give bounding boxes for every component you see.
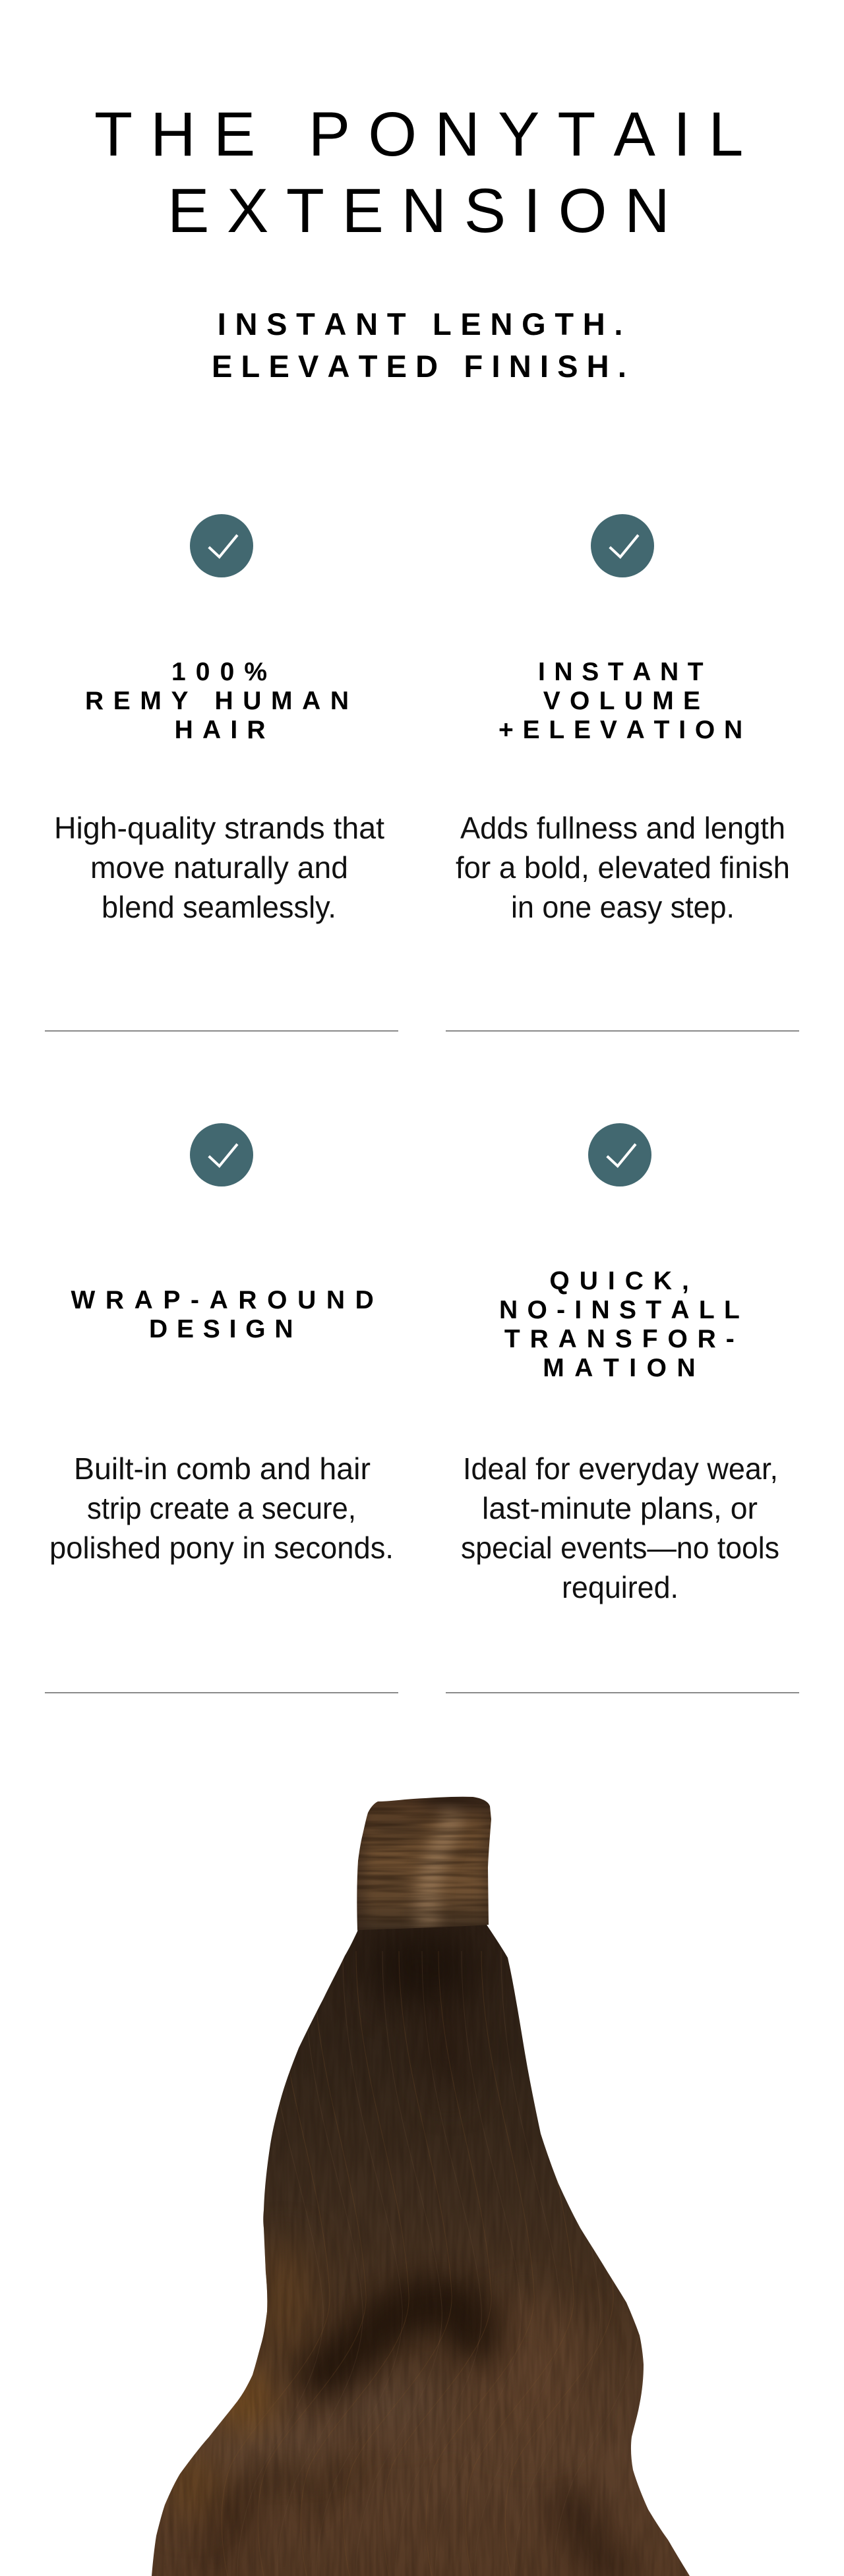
heading: instant volume + elevation: [498, 658, 752, 744]
body text: high-quality strands: [54, 811, 384, 924]
body text: high-quality strands: blend seamlessly.: [102, 890, 336, 924]
panel: 100% remy human hair: [54, 514, 384, 924]
subtitle: INSTANT LENGTH.: [218, 307, 632, 341]
heading: 100% remy human hair: REMY HUMAN: [85, 687, 359, 715]
panel: instant volume + elevation: [456, 514, 790, 924]
body text: high-quality strands: High-quality strands that: [54, 811, 384, 845]
heading: 100% remy human hair: [85, 658, 359, 744]
heading: instant volume + elevation: +ELEVATION: [498, 716, 752, 744]
body text: built-in comb: Built-in comb and hair: [74, 1451, 371, 1486]
body text: built-in comb: [49, 1451, 394, 1565]
heading: quick no-install transformation: NO-INSTALL: [499, 1296, 749, 1324]
body text: adds fullness: [456, 811, 790, 924]
body text: adds fullness: for a bold, elevated finish: [456, 850, 790, 885]
heading: instant volume + elevation: VOLUME: [543, 687, 709, 715]
hair: wrap-around band: [357, 1797, 491, 1930]
heading: wrap-around design: WRAP-AROUND: [71, 1286, 384, 1314]
heading: instant volume + elevation: INSTANT: [538, 658, 712, 686]
icon: check mark badge: [190, 1123, 253, 1186]
icon: check mark badge: [588, 1123, 651, 1186]
illustration: ponytail hair extension: [132, 1793, 712, 2576]
body text: high-quality strands: move naturally and: [90, 850, 348, 885]
panel: wrap-around design: [49, 1123, 394, 1565]
body text: ideal for everyday wear: required.: [562, 1570, 678, 1604]
subtitle: [212, 307, 635, 384]
body text: ideal for everyday wear: Ideal for everyday wear,: [463, 1451, 778, 1486]
title: EXTENSION: [167, 176, 687, 246]
heading: wrap-around design: DESIGN: [149, 1315, 302, 1343]
body text: adds fullness: in one easy step.: [511, 890, 735, 924]
icon: check mark badge: [190, 514, 253, 577]
title: [94, 100, 761, 246]
title: THE PONYTAIL: [94, 100, 761, 169]
body text: built-in comb: strip create a secure,: [87, 1491, 356, 1525]
body text: ideal for everyday wear: special events—no tools: [461, 1531, 779, 1565]
heading: quick no-install transformation: MATION: [543, 1354, 706, 1382]
hair: lower ponytail body: [132, 1918, 712, 2576]
body text: ideal for everyday wear: [461, 1451, 779, 1604]
body text: ideal for everyday wear: last-minute plans, or: [482, 1491, 758, 1525]
heading: quick no-install transformation: QUICK,: [549, 1267, 699, 1295]
heading: quick no-install transformation: [499, 1267, 749, 1382]
body text: adds fullness: Adds fullness and length: [460, 811, 785, 845]
heading: wrap-around design: [71, 1286, 384, 1343]
panel: quick no-install transformation: [461, 1123, 779, 1604]
body text: built-in comb: polished pony in seconds.: [49, 1531, 394, 1565]
icon: check mark badge: [591, 514, 654, 577]
subtitle: ELEVATED FINISH.: [212, 349, 635, 384]
heading: 100% remy human hair: 100%: [171, 658, 277, 686]
heading: quick no-install transformation: TRANSFOR-: [504, 1325, 744, 1353]
heading: 100% remy human hair: HAIR: [175, 716, 275, 744]
